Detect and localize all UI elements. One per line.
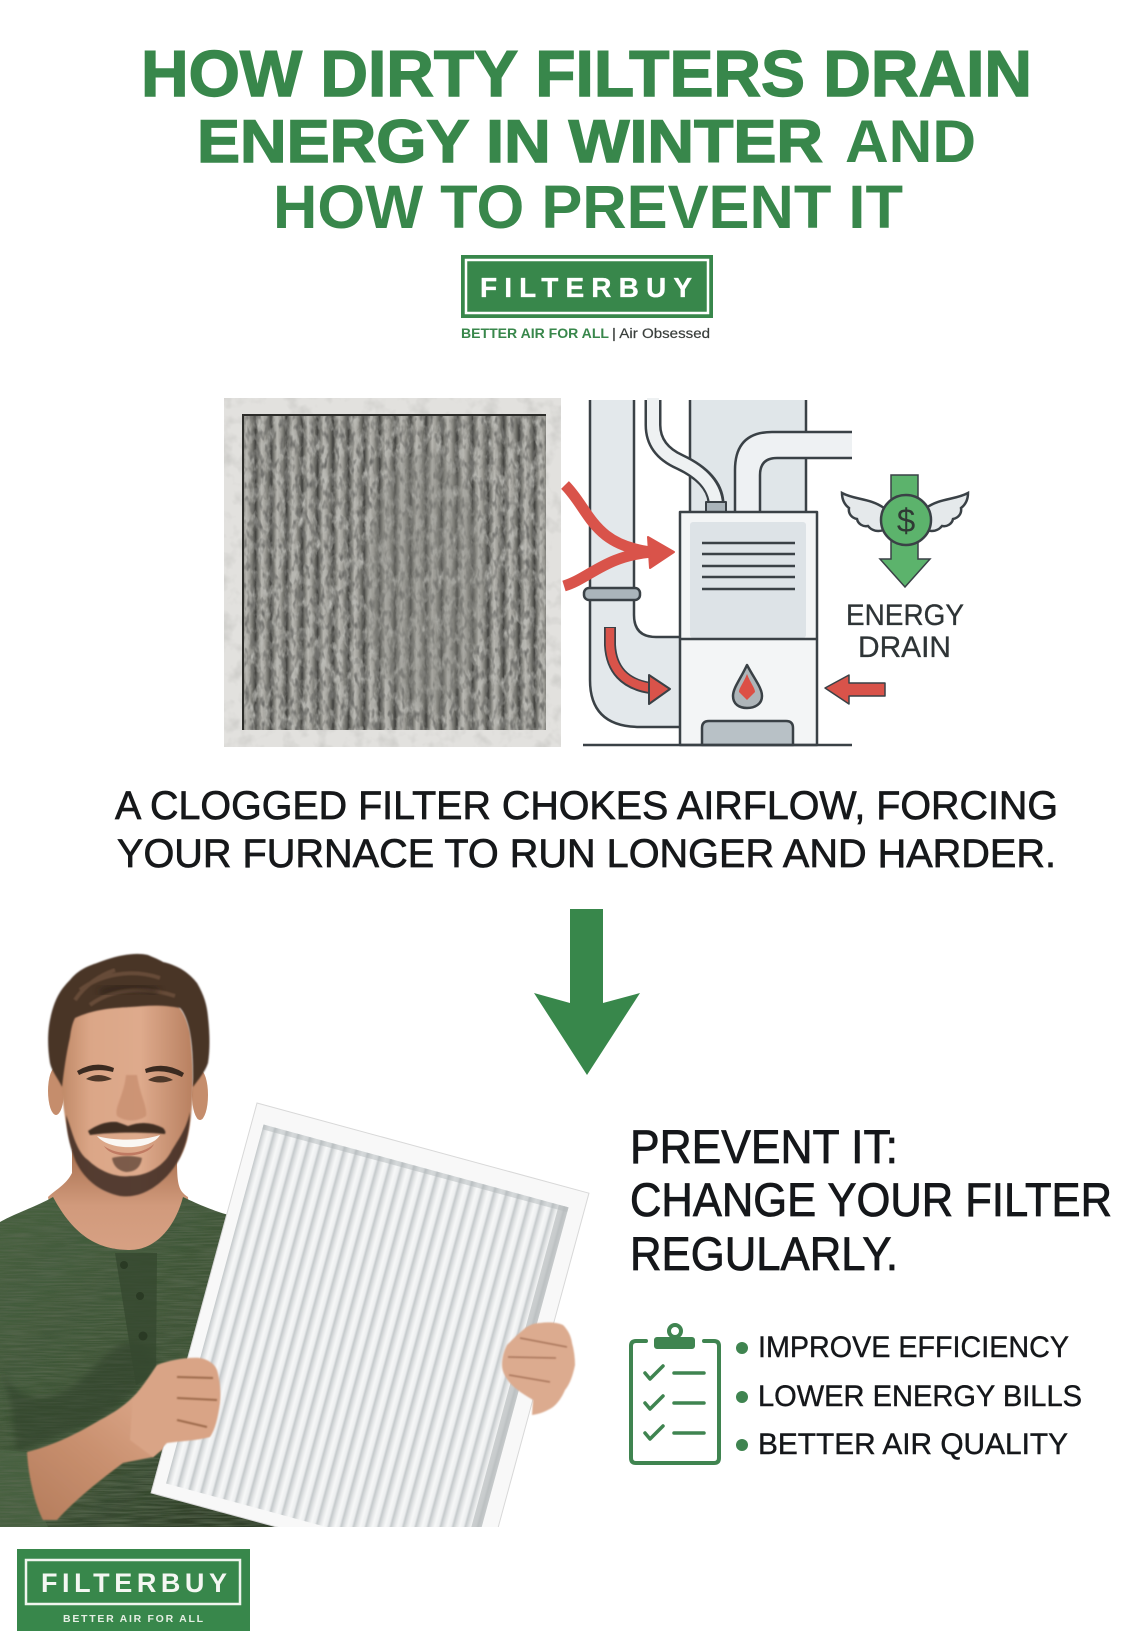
benefit: better air quality: BETTER AIR QUALITY (758, 1428, 1068, 1461)
moustache (88, 1122, 165, 1135)
sleeve (0, 1450, 48, 1527)
title: ENERGY IN WINTER (197, 108, 823, 175)
benefit: lower energy bills: LOWER ENERGY BILLS (758, 1380, 1082, 1413)
logo: Filterbuy footer (17, 1549, 250, 1631)
explanation text: YOUR FURNACE TO RUN LONGER AND HARDER. (117, 832, 1056, 876)
rear duct (690, 400, 806, 512)
logo: Filterbuy footer: FILTERBUY (41, 1568, 227, 1598)
arrow: down to prevention (534, 909, 640, 1075)
placket and buttons (115, 1253, 157, 1385)
title: AND (845, 108, 976, 175)
icon: checklist clipboard (631, 1325, 719, 1463)
right hand (502, 1322, 575, 1415)
prevent heading (630, 1120, 1112, 1280)
title: HOW DIRTY FILTERS DRAIN (141, 37, 1032, 110)
energy drain label: ENERGY (846, 599, 964, 632)
hair highlights (75, 970, 175, 1005)
dirty filter photo (224, 398, 561, 747)
logo tagline: BETTER AIR FOR ALL (461, 326, 609, 341)
left duct (584, 400, 680, 727)
prevent heading: PREVENT IT: (630, 1120, 898, 1173)
hair shadow (100, 987, 158, 993)
logo: Filterbuy header (461, 255, 713, 318)
icon: flame (733, 665, 762, 708)
benefits list (736, 1331, 1082, 1461)
face (62, 1004, 194, 1178)
thin pipe (653, 398, 726, 512)
forearm (27, 1397, 175, 1520)
man holding clean filter photo (0, 954, 589, 1583)
shirt (0, 1197, 275, 1527)
beard (66, 1112, 190, 1196)
eyes and brows (77, 1065, 184, 1082)
explanation text: A CLOGGED FILTER CHOKES AIRFLOW, FORCING (115, 784, 1058, 828)
left hand (130, 1358, 220, 1457)
hair (48, 954, 209, 1087)
furnace cabinet (680, 512, 817, 745)
benefit: improve efficiency: IMPROVE EFFICIENCY (758, 1331, 1069, 1364)
lower lip (104, 1144, 154, 1156)
smile (97, 1135, 160, 1147)
arrow: return air (825, 675, 885, 704)
neck (48, 1150, 188, 1250)
title: HOW TO PREVENT IT (273, 173, 903, 241)
beard chin shading (112, 1156, 142, 1172)
logo tagline (461, 326, 710, 341)
prevent heading: REGULARLY. (630, 1227, 898, 1280)
logo: Filterbuy footer: BETTER AIR FOR ALL (63, 1613, 204, 1625)
energy drain label: DRAIN (858, 631, 951, 664)
logo: Filterbuy header: FILTERBUY (480, 272, 692, 303)
logo tagline: | Air Obsessed (612, 326, 710, 341)
icon: winged dollar arrow (842, 475, 968, 587)
title (141, 37, 1032, 241)
arrow: airflow into furnace (610, 627, 670, 704)
energy drain label (846, 599, 964, 664)
clean filter (150, 1102, 590, 1527)
ground line (583, 744, 852, 746)
explanation text (115, 784, 1058, 876)
arrow: restricted airflow (564, 485, 674, 586)
furnace diagram (564, 398, 885, 745)
nose (116, 1075, 146, 1120)
icon: winged dollar arrow: $ (897, 502, 915, 539)
ears (48, 1067, 208, 1120)
horizontal duct (735, 432, 852, 512)
shirt shadow by arm (7, 1342, 142, 1450)
